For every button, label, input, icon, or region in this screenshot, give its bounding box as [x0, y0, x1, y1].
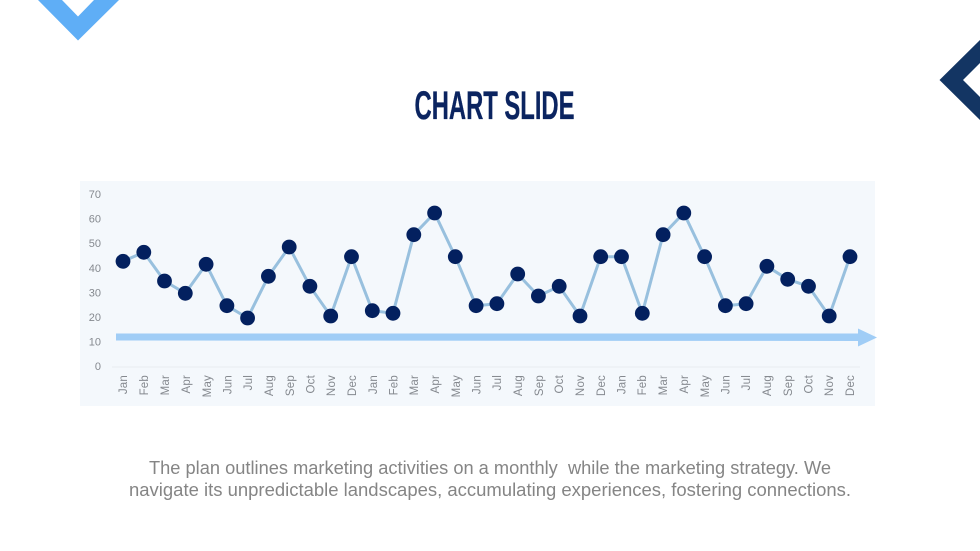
x axis labels: Aug — [264, 375, 276, 396]
chart background — [80, 181, 875, 406]
x axis labels: Dec — [845, 375, 857, 396]
x axis labels: Nov — [326, 375, 338, 396]
title: CHART SLIDE — [414, 84, 574, 128]
x axis labels: Nov — [824, 375, 836, 396]
body text — [129, 458, 851, 500]
x axis labels: Nov — [575, 375, 587, 396]
y axis labels: 10 — [89, 336, 101, 348]
arrow: trend — [116, 328, 877, 346]
data points — [116, 206, 857, 325]
y axis labels: 70 — [89, 189, 101, 201]
x axis labels: Sep — [783, 375, 795, 396]
x axis labels: Mar — [409, 375, 421, 395]
body text: The plan outlines marketing activities on a monthly while the marketing strategy. We — [149, 458, 831, 478]
y axis labels: 60 — [89, 214, 101, 226]
x axis labels: Aug — [513, 375, 525, 396]
x axis labels: Feb — [637, 375, 649, 395]
icon: top-left light blue chevron — [38, 0, 119, 40]
x axis labels: Aug — [762, 375, 774, 396]
x axis labels: Mar — [658, 375, 670, 395]
x axis labels: Sep — [534, 375, 546, 396]
x axis labels: Dec — [596, 375, 608, 396]
x axis labels: Sep — [285, 375, 297, 396]
y axis labels: 40 — [89, 263, 101, 275]
x axis labels: Jul — [243, 375, 255, 390]
x axis labels: Jan — [616, 375, 628, 394]
x axis labels — [118, 374, 857, 397]
x axis labels: Feb — [388, 375, 400, 395]
data line — [123, 213, 850, 318]
x axis labels: Oct — [804, 374, 816, 394]
x axis labels: Apr — [430, 375, 442, 394]
icon: right dark blue chevron — [940, 40, 980, 120]
x axis labels: May — [202, 375, 214, 397]
x axis labels: Mar — [160, 375, 172, 395]
x axis labels: Jul — [492, 375, 504, 390]
panel: line chart — [80, 181, 877, 406]
x axis labels: Jul — [741, 375, 753, 390]
x axis labels: May — [700, 375, 712, 397]
y axis labels — [89, 189, 101, 373]
x axis labels: Apr — [679, 375, 691, 394]
y axis labels: 50 — [89, 238, 101, 250]
y axis labels: 0 — [95, 361, 101, 373]
x axis labels: Jun — [472, 375, 484, 394]
x axis labels: Jun — [222, 375, 234, 394]
x axis labels: Dec — [347, 375, 359, 396]
x axis labels: Jan — [118, 375, 130, 394]
x axis line — [112, 366, 860, 368]
x axis labels: Jan — [368, 375, 380, 394]
x axis labels: Jun — [720, 375, 732, 394]
x axis labels: Oct — [306, 374, 318, 394]
x axis labels: May — [451, 375, 463, 397]
x axis labels: Feb — [139, 375, 151, 395]
body text: navigate its unpredictable landscapes, accumulating experiences, fostering connections. — [129, 480, 851, 500]
x axis labels: Oct — [554, 374, 566, 394]
y axis labels: 20 — [89, 312, 101, 324]
y axis labels: 30 — [89, 288, 101, 300]
x axis labels: Apr — [181, 375, 193, 394]
